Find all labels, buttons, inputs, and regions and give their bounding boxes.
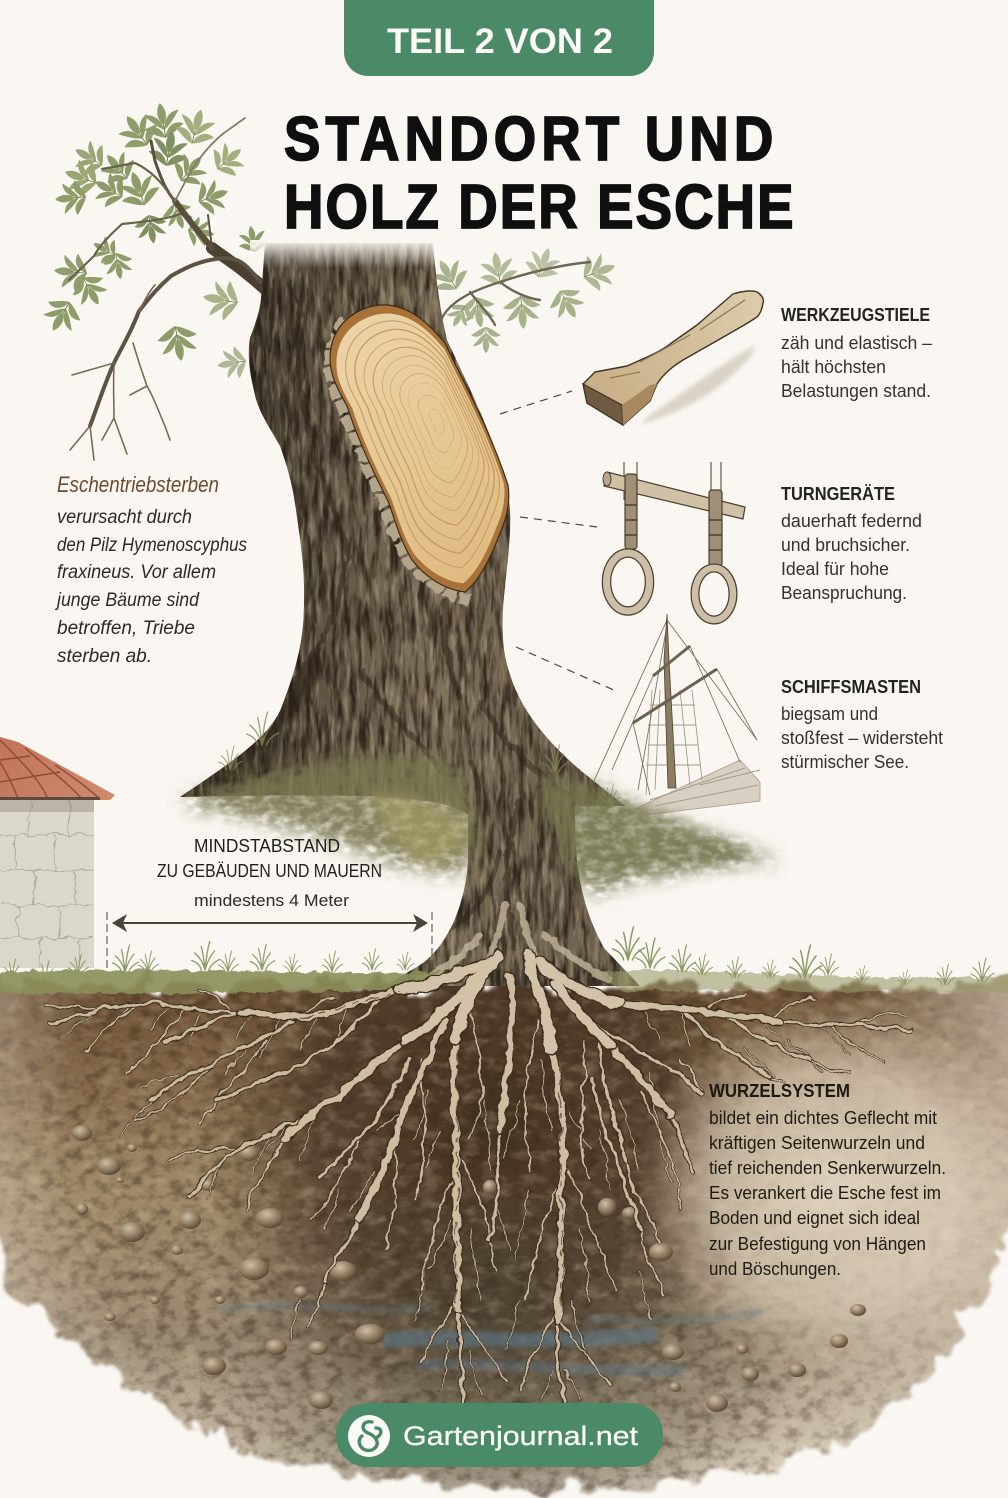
text block: ash dieback: den Pilz Hymenoscyphus: [57, 535, 247, 556]
text block: ash dieback: junge Bäume sind: [54, 590, 200, 611]
text block: root system: kräftigen Seitenwurzeln und: [709, 1133, 925, 1153]
title: [284, 105, 794, 242]
text block: tool handles: Belastungen stand.: [781, 381, 931, 401]
leaves: [37, 100, 270, 382]
text block: root system: Boden und eignet sich ideal: [709, 1208, 920, 1228]
right branch with leaves: [424, 242, 621, 353]
soil cross-section: [0, 960, 1008, 1498]
main branch: [69, 118, 268, 460]
text block: root system: und Böschungen.: [709, 1259, 841, 1279]
root system: [45, 955, 910, 1402]
ground grass: [0, 927, 1008, 995]
footer badge: [336, 1403, 663, 1467]
text block: ash dieback: sterben ab.: [57, 646, 152, 667]
tree trunk: [170, 240, 650, 990]
footer badge: Gartenjournal.net: [403, 1421, 639, 1451]
growth rings: [346, 321, 499, 568]
text block: ash dieback: verursacht durch: [57, 507, 192, 528]
text block: root system: [709, 1081, 946, 1279]
text block: root system: bildet ein dichtes Geflecht mit: [709, 1108, 937, 1128]
text block: ship masts: stürmischer See.: [781, 752, 909, 772]
bark fringe: [330, 320, 470, 600]
cut wood section with growth rings: [330, 305, 509, 600]
text block: gymnastic equipment: Beanspruchung.: [781, 583, 907, 603]
grass wisps on the mound: [219, 712, 621, 805]
text block: gymnastic equipment: dauerhaft federnd: [781, 511, 922, 531]
banner: part label: TEIL 2 VON 2: [387, 22, 613, 61]
title: STANDORT UND: [284, 105, 773, 174]
text block: gymnastic equipment: TURNGERÄTE: [781, 484, 895, 504]
groundwater band: [225, 1306, 760, 1370]
icon: logo: [348, 1415, 390, 1457]
text block: tool handles: zäh und elastisch –: [781, 333, 932, 353]
text block: ship masts: stoßfest – widersteht: [781, 728, 943, 748]
stone wall: [0, 798, 94, 968]
text block: ship masts: SCHIFFSMASTEN: [781, 677, 921, 697]
dashed leader lines: [500, 391, 616, 691]
moss and grass mound around the trunk: [178, 712, 780, 892]
text block: ash dieback: Eschentriebsterben: [57, 472, 219, 497]
text block: root system: tief reichenden Senkerwurzeln.: [709, 1158, 946, 1178]
arrow: 4 metre distance: [107, 912, 432, 968]
banner: part label: [344, 0, 654, 76]
text block: ship masts: [781, 677, 943, 772]
text block: root system: WURZELSYSTEM: [709, 1081, 850, 1101]
icon: tool handle: [583, 291, 763, 425]
text block: ash dieback: [54, 472, 247, 667]
minimum distance label: ZU GEBÄUDEN UND MAUERN: [157, 861, 382, 881]
icon: ship mast: [593, 614, 760, 815]
left branches with leaves: [37, 100, 270, 460]
text block: root system: Es verankert die Esche fest im: [709, 1183, 941, 1203]
text block: root system: zur Befestigung von Hängen: [709, 1234, 926, 1254]
text block: gymnastic equipment: [781, 484, 922, 603]
minimum distance label: MINDSTABSTAND: [194, 836, 340, 856]
title: HOLZ DER ESCHE: [284, 173, 794, 242]
minimum distance label: mindestens 4 Meter: [194, 891, 349, 910]
icon: gymnastic rings: [603, 462, 745, 620]
text block: ship masts: biegsam und: [781, 704, 878, 724]
text block: gymnastic equipment: und bruchsicher.: [781, 535, 910, 555]
text block: tool handles: hält höchsten: [781, 357, 886, 377]
text block: tool handles: [781, 305, 932, 401]
text block: ash dieback: betroffen, Triebe: [57, 618, 195, 639]
stones: [72, 1125, 866, 1412]
text block: tool handles: WERKZEUGSTIELE: [781, 305, 930, 325]
house with tiled roof: [0, 737, 115, 968]
roof: [0, 737, 115, 800]
minimum distance label: [157, 836, 382, 910]
text block: ash dieback: fraxineus. Vor allem: [57, 562, 216, 583]
text block: gymnastic equipment: Ideal für hohe: [781, 559, 889, 579]
